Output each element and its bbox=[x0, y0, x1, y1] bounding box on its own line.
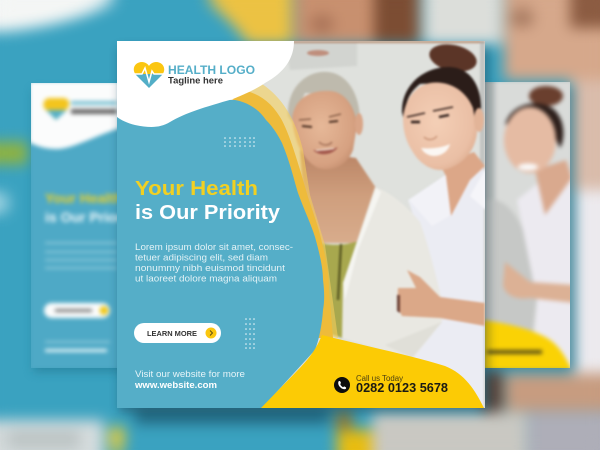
dot grid bottom bbox=[245, 318, 255, 349]
headline: Your Health bbox=[135, 178, 258, 200]
website text bbox=[135, 370, 244, 388]
elder cardigan bbox=[342, 187, 442, 358]
teal panel bbox=[117, 100, 324, 408]
body text: ut laoreet dolore magna aliquam bbox=[135, 274, 277, 284]
elder hair and face bbox=[288, 72, 363, 169]
left blurred mock-up card: is Our Priority bbox=[45, 209, 139, 225]
light yellow translucent band bbox=[232, 84, 338, 338]
nurse coat bbox=[408, 164, 484, 408]
yellow phone panel bbox=[261, 335, 484, 408]
body text: tetuer adipiscing elit, sed diam bbox=[135, 252, 268, 264]
photo: two people bbox=[287, 41, 485, 406]
website text: www.website.com bbox=[134, 380, 217, 391]
white logo panel bbox=[117, 41, 294, 127]
body text: nonummy nibh euismod tincidunt bbox=[135, 263, 285, 274]
main card shadow bbox=[119, 47, 489, 413]
elder green top bbox=[322, 240, 358, 339]
tagline: Tagline here bbox=[168, 76, 223, 86]
solid yellow curved band bbox=[233, 92, 333, 338]
photo: wall background bbox=[230, 41, 485, 408]
learn more button bbox=[134, 323, 221, 343]
logo bbox=[134, 62, 254, 88]
icon: heart with pulse bbox=[134, 62, 164, 88]
headline bbox=[135, 178, 281, 224]
main card bbox=[117, 40, 486, 408]
nurse hair and face bbox=[402, 40, 484, 170]
headline: is Our Priority bbox=[135, 202, 281, 224]
phone contact: 0282 0123 5678 bbox=[356, 380, 448, 395]
nurse neck bbox=[440, 152, 485, 216]
nurse arm and hand bbox=[397, 270, 485, 326]
phone contact bbox=[334, 375, 448, 393]
left blurred mock-up card: Your Health bbox=[45, 190, 123, 206]
dot grid top bbox=[224, 137, 255, 147]
phone contact: Call us Today bbox=[356, 374, 403, 383]
body text: Lorem ipsum dolor sit amet, consec- bbox=[135, 242, 293, 253]
left blurred mock-up card bbox=[30, 83, 117, 375]
elder neck bbox=[300, 150, 376, 243]
logo name: HEALTH LOGO bbox=[168, 65, 255, 77]
icon: arrow circle bbox=[206, 328, 216, 338]
icon: phone bbox=[334, 377, 350, 393]
website text: Visit our website for more bbox=[135, 369, 245, 379]
body text bbox=[135, 242, 293, 284]
right blurred mock-up card bbox=[483, 80, 576, 370]
learn more button: LEARN MORE bbox=[147, 329, 197, 338]
